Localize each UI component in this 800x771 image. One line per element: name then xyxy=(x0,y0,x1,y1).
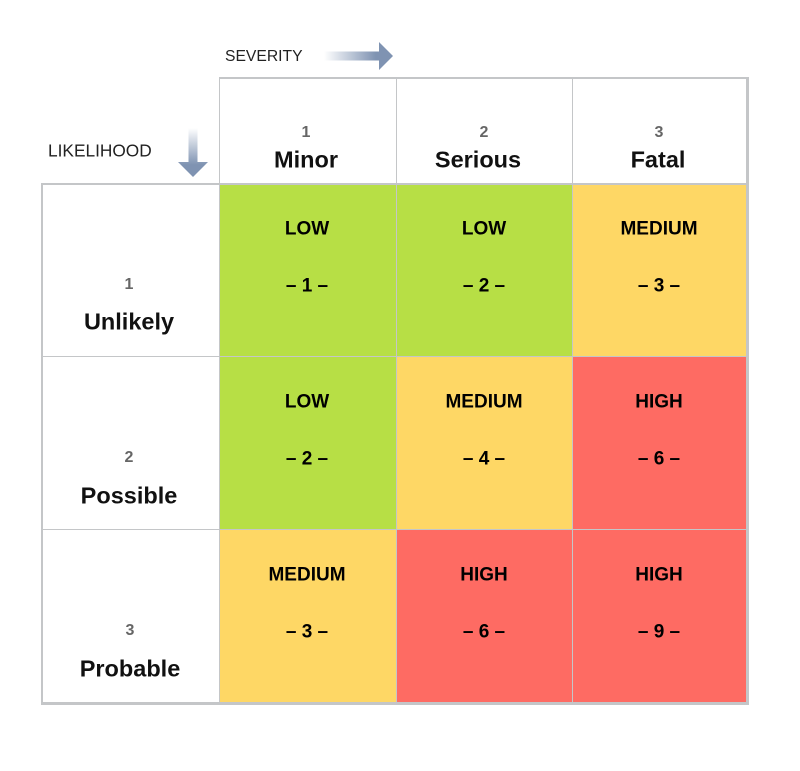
cell: low 1: LOW xyxy=(285,218,329,240)
cell: low 2: LOW xyxy=(462,218,506,240)
cell: low 2 xyxy=(397,184,573,357)
header: severity 3 Fatal xyxy=(631,124,685,172)
header: severity 2 Serious: 2 xyxy=(480,124,488,141)
severity axis label: SEVERITY xyxy=(225,48,303,65)
header: severity 3 Fatal: Fatal xyxy=(631,146,685,172)
cell: high 6: HIGH xyxy=(635,392,683,412)
cell: medium 4: MEDIUM xyxy=(445,392,523,412)
cell: low 1 xyxy=(220,184,397,357)
cell: high 6: – 6 – xyxy=(638,448,680,470)
header: severity 2 Serious: Serious xyxy=(435,146,521,172)
header: severity 1 Minor xyxy=(274,124,338,172)
row header: likelihood 1 Unlikely: 1 xyxy=(125,276,133,293)
icon: severity arrow xyxy=(328,42,393,70)
header: severity 2 Serious xyxy=(435,124,521,172)
row header: likelihood 2 Possible: Possible xyxy=(81,482,177,508)
icon: likelihood arrow xyxy=(178,130,208,177)
cell: high 6 third row: – 6 – xyxy=(463,622,505,642)
risk matrix table xyxy=(41,77,749,705)
cell: high 9: HIGH xyxy=(635,564,683,586)
likelihood axis label: LIKELIHOOD xyxy=(48,140,152,160)
cell: high 6 third row xyxy=(397,530,573,703)
cell: medium 3 third row: – 3 – xyxy=(286,622,328,642)
row header: likelihood 1 Unlikely: Unlikely xyxy=(84,308,174,334)
cell: medium 4 xyxy=(397,357,573,530)
cell: medium 3 third row xyxy=(220,530,397,703)
row header: likelihood 3 Probable: 3 xyxy=(126,622,134,639)
cell: low 2: – 2 – xyxy=(463,276,505,296)
cell: low 2 second row xyxy=(220,357,397,530)
cell: low 1: – 1 – xyxy=(286,276,328,296)
row header: likelihood 1 Unlikely xyxy=(84,276,174,334)
row header: likelihood 3 Probable: Probable xyxy=(80,655,180,681)
header: severity 1 Minor: 1 xyxy=(302,124,310,141)
cell: medium 3 third row: MEDIUM xyxy=(268,564,346,586)
cell: high 6 xyxy=(573,357,748,530)
cell: low 2 second row: – 2 – xyxy=(286,448,328,470)
cell: high 9 xyxy=(573,530,748,703)
header: severity 1 Minor: Minor xyxy=(274,146,338,172)
cell: medium 3 xyxy=(573,184,748,357)
cell: medium 3: – 3 – xyxy=(638,276,680,296)
cell: medium 3: MEDIUM xyxy=(620,218,698,240)
cell: low 2 second row: LOW xyxy=(285,392,329,412)
row header: likelihood 2 Possible xyxy=(81,449,177,508)
cell: medium 4: – 4 – xyxy=(463,448,505,470)
cell: high 6 third row: HIGH xyxy=(460,564,508,586)
cell: high 9: – 9 – xyxy=(638,622,680,642)
row header: likelihood 2 Possible: 2 xyxy=(125,449,133,466)
header: severity 3 Fatal: 3 xyxy=(655,124,663,141)
row header: likelihood 3 Probable xyxy=(80,622,180,681)
